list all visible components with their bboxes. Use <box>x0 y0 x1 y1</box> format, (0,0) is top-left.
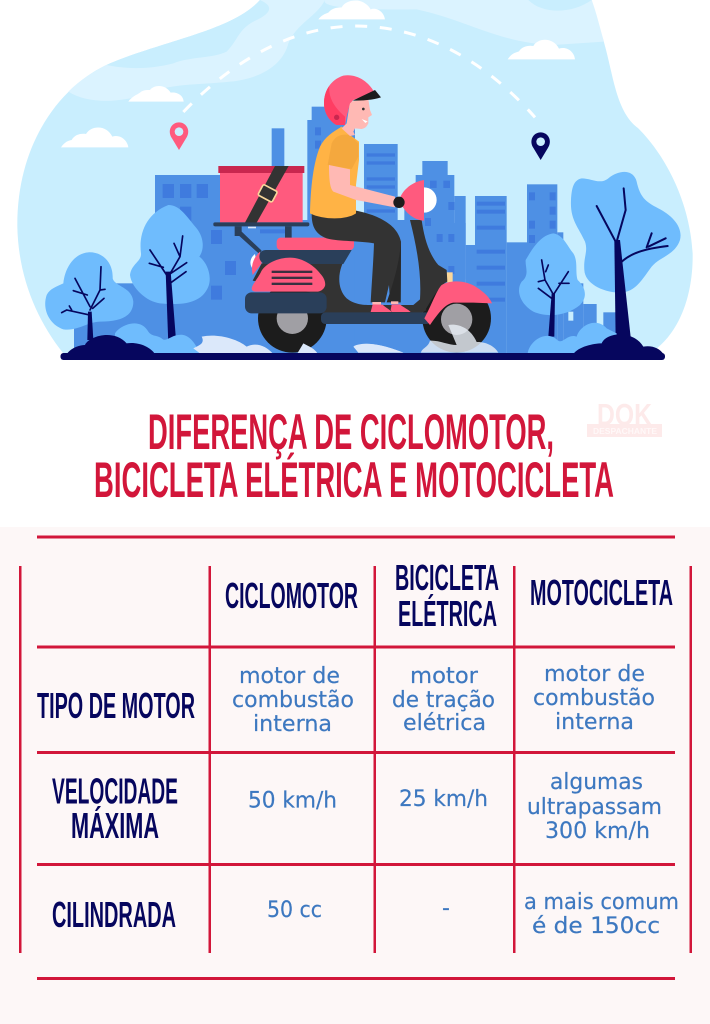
light bushes <box>115 323 200 353</box>
row: tipo de motor values: interna <box>555 710 634 735</box>
illustration: delivery scooter in the city <box>17 0 693 360</box>
row: cilindrada values: a mais comum <box>524 890 679 915</box>
row: velocidade máxima values: ultrapassam <box>527 795 662 820</box>
row: tipo de motor values: motor <box>410 664 479 689</box>
row: velocidade máxima values: 25 km/h <box>399 787 488 812</box>
rider torso <box>310 127 359 218</box>
scooter and rider <box>193 75 498 353</box>
row: cilindrada values <box>267 890 679 939</box>
seat base <box>259 250 352 264</box>
tail light <box>250 252 262 275</box>
route: dashed path between pins <box>183 26 535 117</box>
row: velocidade máxima values <box>248 770 662 844</box>
row: cilindrada values: é de 150cc <box>532 914 660 939</box>
helmet <box>324 75 381 125</box>
row: tipo de motor values: combustão <box>533 686 655 711</box>
clouds <box>61 1 575 147</box>
row: tipo de motor values: elétrica <box>403 711 486 736</box>
row headers <box>37 685 195 935</box>
tree 3 <box>519 233 585 337</box>
scooter lower parts <box>245 210 498 353</box>
row: tipo de motor values: interna <box>253 712 332 737</box>
row headers: VELOCIDADE <box>52 770 178 812</box>
watermark logo: DOK <box>597 397 652 432</box>
trees and bushes <box>45 172 681 354</box>
handlebar grip <box>393 197 405 208</box>
face <box>342 99 372 136</box>
front wheel <box>422 284 491 353</box>
ground line <box>60 353 665 360</box>
row: velocidade máxima values: 50 km/h <box>248 788 337 814</box>
front fender <box>424 281 492 325</box>
tree 2 <box>130 205 210 344</box>
row headers: TIPO DE MOTOR <box>37 685 195 726</box>
row headers: CILINDRADA <box>52 894 176 935</box>
rear floor panel <box>245 292 327 313</box>
column headers <box>225 557 673 634</box>
background blob <box>17 0 693 353</box>
watermark logo: DESPACHANTE <box>593 427 658 436</box>
city buildings <box>74 107 620 353</box>
head, helmet and headlight <box>324 75 437 221</box>
seat <box>277 238 354 250</box>
rear fender <box>252 258 325 292</box>
panel: comparison table <box>0 527 710 1024</box>
rider sleeve <box>328 135 358 169</box>
row: cilindrada values: 50 cc <box>267 898 322 923</box>
row: velocidade máxima values: algumas <box>550 770 643 795</box>
footboard <box>321 312 430 324</box>
steering column <box>410 220 453 311</box>
rider legs <box>312 210 411 312</box>
title <box>94 404 614 508</box>
rider arm <box>329 165 395 207</box>
delivery box <box>218 166 304 223</box>
row: cilindrada values: - <box>442 896 450 921</box>
tree 1 <box>45 252 133 340</box>
row: tipo de motor values: de tração <box>392 688 495 713</box>
rear wheel <box>258 284 327 353</box>
scooter body <box>253 253 427 314</box>
row headers: MÁXIMA <box>71 805 159 846</box>
column headers: BICICLETA <box>395 557 499 598</box>
ground splashes <box>193 336 403 353</box>
table grid <box>19 536 692 980</box>
column headers: CICLOMOTOR <box>225 575 358 616</box>
rack <box>213 222 309 254</box>
icon: pink map pin <box>170 122 188 150</box>
column headers: ELÉTRICA <box>398 593 497 634</box>
dark bushes <box>67 335 155 354</box>
row: tipo de motor values: combustão <box>232 688 354 713</box>
splash over front wheel <box>421 325 498 353</box>
row: tipo de motor values: motor de <box>239 664 340 689</box>
row: velocidade máxima values: 300 km/h <box>545 819 650 844</box>
icon: navy map pin <box>531 132 550 160</box>
headlight <box>399 180 437 221</box>
centre splash <box>354 344 403 353</box>
tree 4 <box>571 172 681 340</box>
row: tipo de motor values: motor de <box>544 662 645 687</box>
row: tipo de motor values <box>232 662 655 737</box>
